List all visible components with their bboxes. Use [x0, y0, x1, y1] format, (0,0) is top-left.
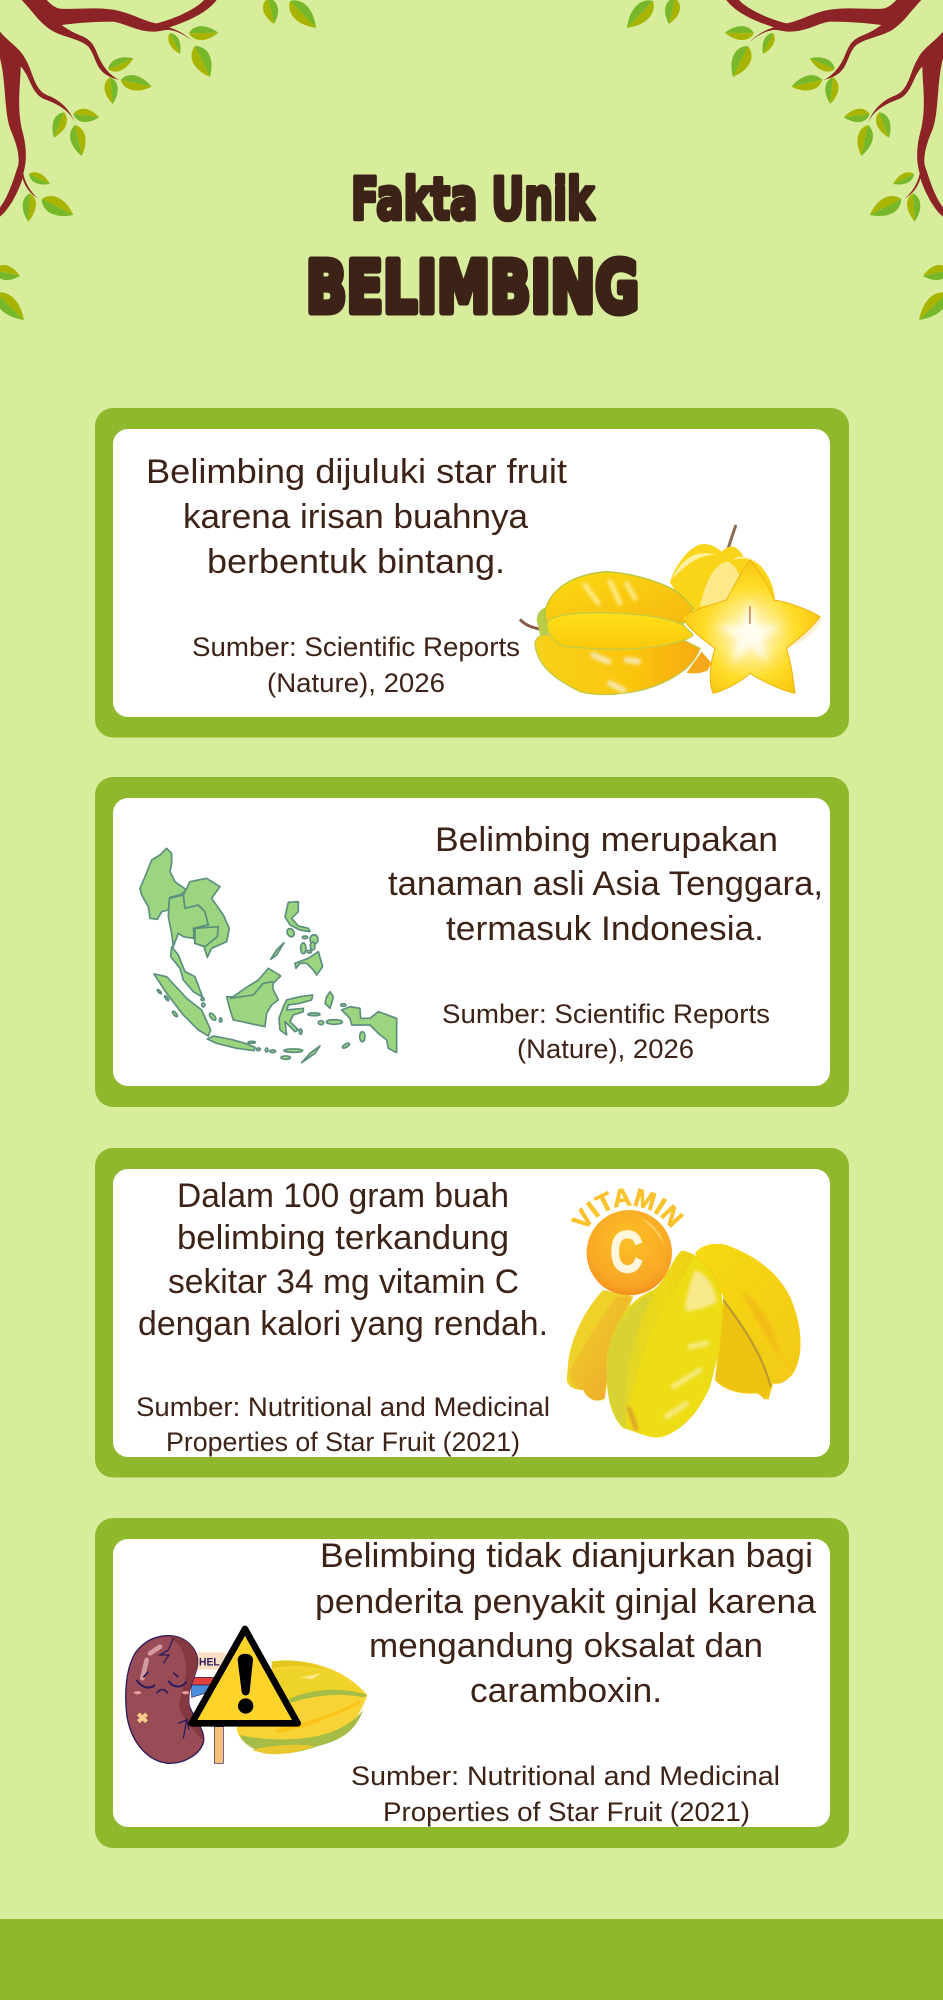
icon: vitamin C badge — [570, 1188, 684, 1296]
icon: vitamin C badge: C — [610, 1220, 643, 1285]
fact text — [315, 1537, 816, 1710]
source text — [136, 1392, 550, 1457]
panel: kidney warning — [95, 1518, 849, 1848]
fact text — [138, 1177, 548, 1343]
panel: vitamin C content — [95, 1148, 849, 1478]
tree branches with leaves: top left — [0, 0, 322, 326]
illustration: sad kidney — [126, 1636, 204, 1763]
source text: Properties of Star Fruit (2021) — [166, 1427, 520, 1457]
fact text: belimbing terkandung — [177, 1219, 509, 1257]
icon: star fruit with slice — [520, 525, 823, 694]
panel: star fruit name — [95, 408, 849, 738]
fact text — [146, 453, 568, 581]
icon: star fruit bunch — [567, 1244, 801, 1437]
source text: Properties of Star Fruit (2021) — [383, 1797, 750, 1827]
fact text: karena irisan buahnya — [183, 498, 528, 536]
fact text: sekitar 34 mg vitamin C — [168, 1263, 519, 1301]
source text: Sumber: Nutritional and Medicinal — [136, 1392, 550, 1422]
footer band — [0, 1919, 943, 2000]
fact text: Belimbing dijuluki star fruit — [146, 453, 568, 491]
fact text — [388, 821, 823, 948]
source text — [351, 1761, 780, 1827]
icon: vitamin C badge: VITAMIN — [570, 1188, 684, 1228]
title — [306, 165, 639, 329]
fact text: Belimbing tidak dianjurkan bagi — [320, 1537, 813, 1575]
fact text: mengandung oksalat dan — [369, 1627, 763, 1665]
source text — [192, 632, 520, 698]
panel: origin in Southeast Asia — [95, 777, 849, 1107]
fact text: Belimbing merupakan — [435, 821, 778, 859]
fact text: penderita penyakit ginjal karena — [315, 1583, 816, 1621]
fact text: termasuk Indonesia. — [446, 910, 764, 948]
heading: Fakta Unik: Fakta Unik — [351, 165, 595, 233]
source text — [442, 999, 770, 1064]
map: Southeast Asia — [140, 848, 397, 1063]
source text: (Nature), 2026 — [517, 1034, 694, 1064]
illustration: star fruit — [237, 1660, 367, 1754]
illustration: HELP sign: HEL — [199, 1656, 220, 1668]
source text: Sumber: Nutritional and Medicinal — [351, 1761, 780, 1791]
icon: sick kidney, star fruit and warning sign — [126, 1629, 367, 1763]
source text: Sumber: Scientific Reports — [192, 632, 520, 662]
fact text: dengan kalori yang rendah. — [138, 1305, 548, 1343]
source text: (Nature), 2026 — [267, 668, 445, 698]
tree branches with leaves: top right — [621, 0, 943, 326]
fact text: caramboxin. — [470, 1672, 662, 1710]
heading: BELIMBING: BELIMBING — [306, 246, 639, 329]
illustration: HELP sign — [192, 1652, 227, 1763]
source text: Sumber: Scientific Reports — [442, 999, 770, 1029]
fact text: tanaman asli Asia Tenggara, — [388, 865, 823, 903]
fact text: Dalam 100 gram buah — [177, 1177, 509, 1215]
fact text: berbentuk bintang. — [207, 543, 505, 581]
icon: warning triangle — [192, 1629, 298, 1723]
